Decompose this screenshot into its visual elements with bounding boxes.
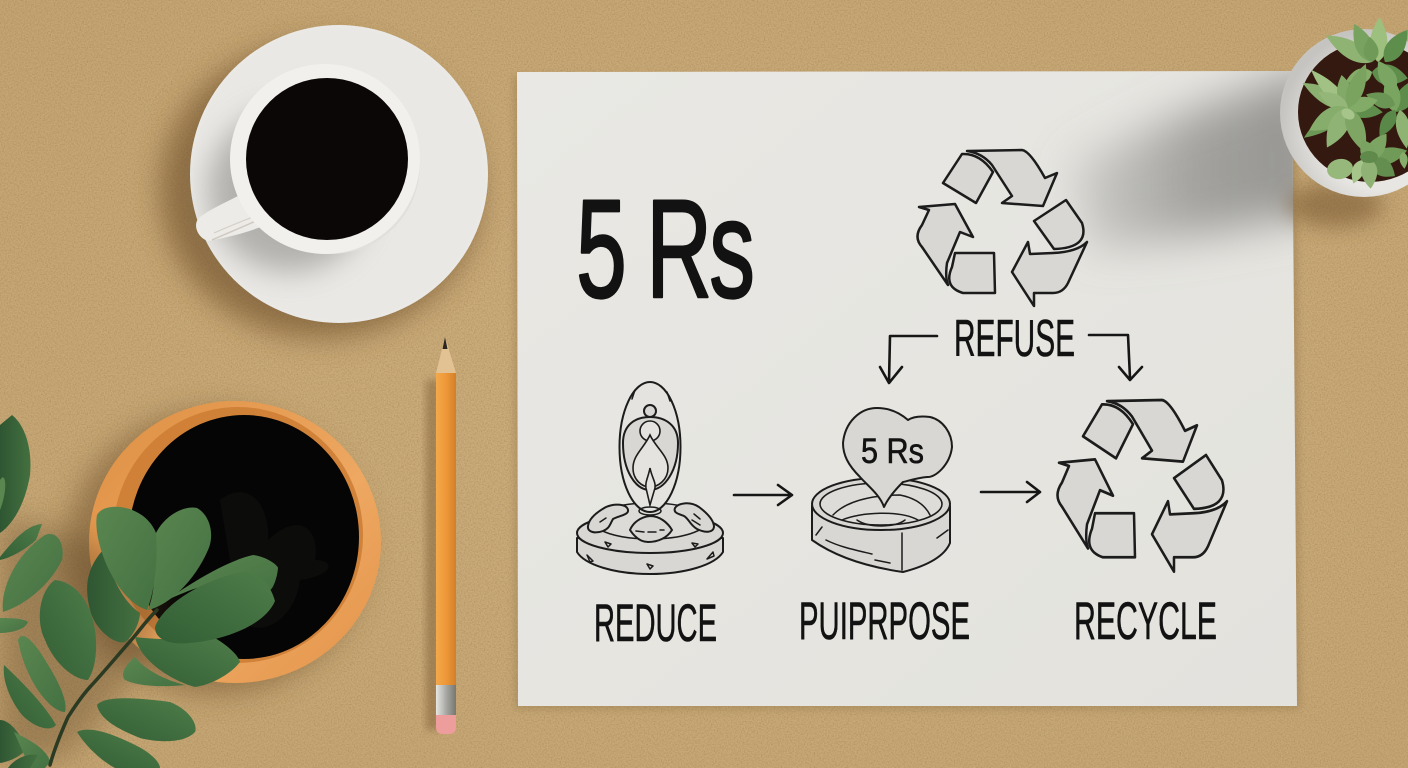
orange plant pot: [65, 401, 381, 694]
table shadow under succulent: [1287, 183, 1383, 227]
lower rosette: [1325, 129, 1408, 189]
title: 5 Rs: [576, 171, 755, 328]
sheet of paper: [514, 71, 1300, 709]
icon: recycling symbol, recycle: [1058, 400, 1227, 572]
black soil: [129, 415, 359, 659]
arrow: refuse to recycle: [1089, 335, 1142, 380]
heart bubble: [843, 408, 952, 507]
bowl: [812, 506, 950, 572]
green leafy branch: [0, 415, 278, 768]
cup shadow on saucer: [208, 108, 372, 272]
heart text: 5 Rs: [861, 432, 924, 471]
top rosette: [1322, 17, 1408, 89]
left rosette: [1299, 61, 1384, 156]
arrow: refuse to purpose: [880, 336, 937, 383]
cup body: [242, 76, 420, 254]
base marks: [587, 542, 714, 569]
soil: [1298, 42, 1408, 182]
cup handle: [196, 195, 268, 241]
far leaves: [0, 415, 30, 533]
icon: recycling symbol, refuse: [918, 150, 1087, 306]
arrow: reduce to purpose: [734, 485, 792, 505]
label: reduce: REDUCE: [594, 594, 717, 653]
stem: [50, 610, 157, 765]
arrow: purpose to recycle: [981, 482, 1040, 502]
branch shadow: [0, 520, 170, 760]
cast shadow on paper: [1070, 65, 1330, 250]
rocks: [588, 505, 628, 532]
label: purpose: PUIPRPOSE: [799, 592, 970, 651]
icon: reduce figure on stone base: [577, 382, 723, 574]
saucer shadow on table: [160, 42, 480, 338]
succulent in white pot: [1280, 17, 1408, 197]
label: refuse: REFUSE: [954, 310, 1075, 368]
oval capsule: [620, 382, 680, 512]
pencil: [426, 337, 456, 734]
front leaves: [167, 555, 278, 600]
coffee cup on saucer: [160, 25, 488, 338]
mid leaves: [40, 580, 96, 680]
white pot: [1280, 29, 1408, 197]
icon: bowl with heart speech bubble: [812, 408, 952, 572]
stone base: [577, 538, 723, 574]
right rosette: [1364, 57, 1408, 150]
label: recycle: RECYCLE: [1074, 592, 1217, 651]
saucer: [190, 25, 488, 323]
cup rim: [230, 64, 420, 254]
coffee: [246, 78, 408, 240]
